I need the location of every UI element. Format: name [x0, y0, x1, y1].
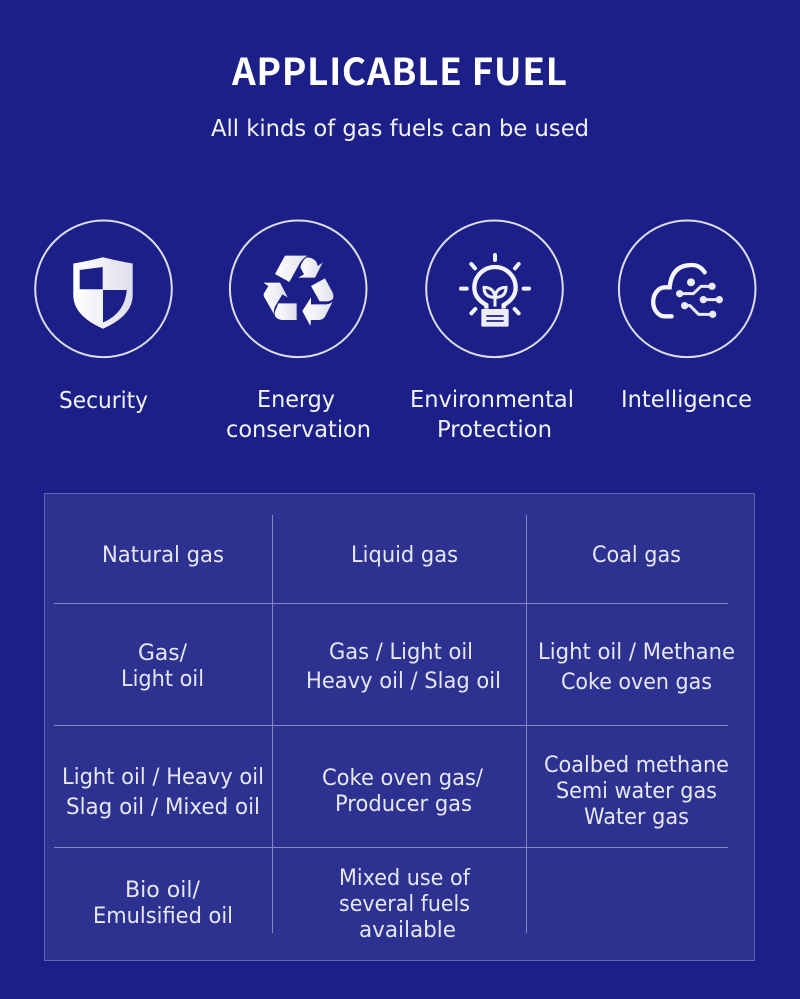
icon: cloud network: [653, 265, 723, 318]
row 1: Coal gas: [592, 543, 681, 568]
row 3: Producer gas: [335, 792, 472, 817]
label: energy conservation: Energy: [257, 387, 335, 413]
icon ring: security: [35, 220, 172, 357]
label: environmental protection: [410, 387, 574, 443]
label: environmental protection: Environmental: [410, 387, 574, 413]
feature: security: [35, 220, 172, 414]
subtitle: All kinds of gas fuels can be used: [211, 116, 589, 142]
feature: environmental protection: [410, 220, 574, 443]
icon: light bulb with leaf: [461, 255, 529, 327]
icon: recycle: [263, 256, 333, 326]
icon ring: energy conservation: [230, 220, 366, 357]
label: energy conservation: conservation: [226, 417, 371, 443]
label: environmental protection: Protection: [437, 417, 552, 443]
label: intelligence: Intelligence: [621, 387, 752, 413]
row 4: [93, 866, 471, 943]
row 3: [62, 753, 729, 830]
row 3: Light oil / Heavy oil: [62, 765, 264, 790]
icon: shield: [73, 257, 133, 329]
row 4: Mixed use of: [339, 866, 471, 891]
fuel table panel: [44, 494, 754, 960]
row 4: several fuels: [339, 892, 470, 917]
row 3: Semi water gas: [556, 779, 717, 804]
row 2: Heavy oil / Slag oil: [306, 669, 501, 694]
row 4: Emulsified oil: [93, 904, 233, 929]
row 2: Light oil: [121, 667, 204, 692]
row 2: [121, 640, 735, 695]
icon ring: environmental protection: [426, 220, 563, 357]
feature: energy conservation: [226, 220, 371, 443]
row 3: Water gas: [584, 805, 689, 830]
label: security: Security: [59, 388, 148, 414]
row 2: Light oil / Methane: [538, 640, 735, 665]
title: APPLICABLE FUEL: [231, 42, 567, 96]
row 2: Coke oven gas: [561, 670, 712, 695]
row 3: Coke oven gas/: [322, 766, 484, 791]
icon ring: intelligence: [619, 220, 756, 357]
feature: intelligence: [619, 220, 756, 413]
row 1: [102, 543, 681, 568]
row 1: Natural gas: [102, 543, 224, 568]
row 4: available: [359, 918, 456, 943]
row 4: Bio oil/: [125, 878, 201, 903]
label: energy conservation: [226, 387, 371, 443]
row 2: Gas / Light oil: [329, 640, 473, 665]
row 3: Coalbed methane: [544, 753, 729, 778]
row 2: Gas/: [138, 641, 188, 666]
row 3: Slag oil / Mixed oil: [66, 795, 260, 820]
row 1: Liquid gas: [351, 543, 458, 568]
